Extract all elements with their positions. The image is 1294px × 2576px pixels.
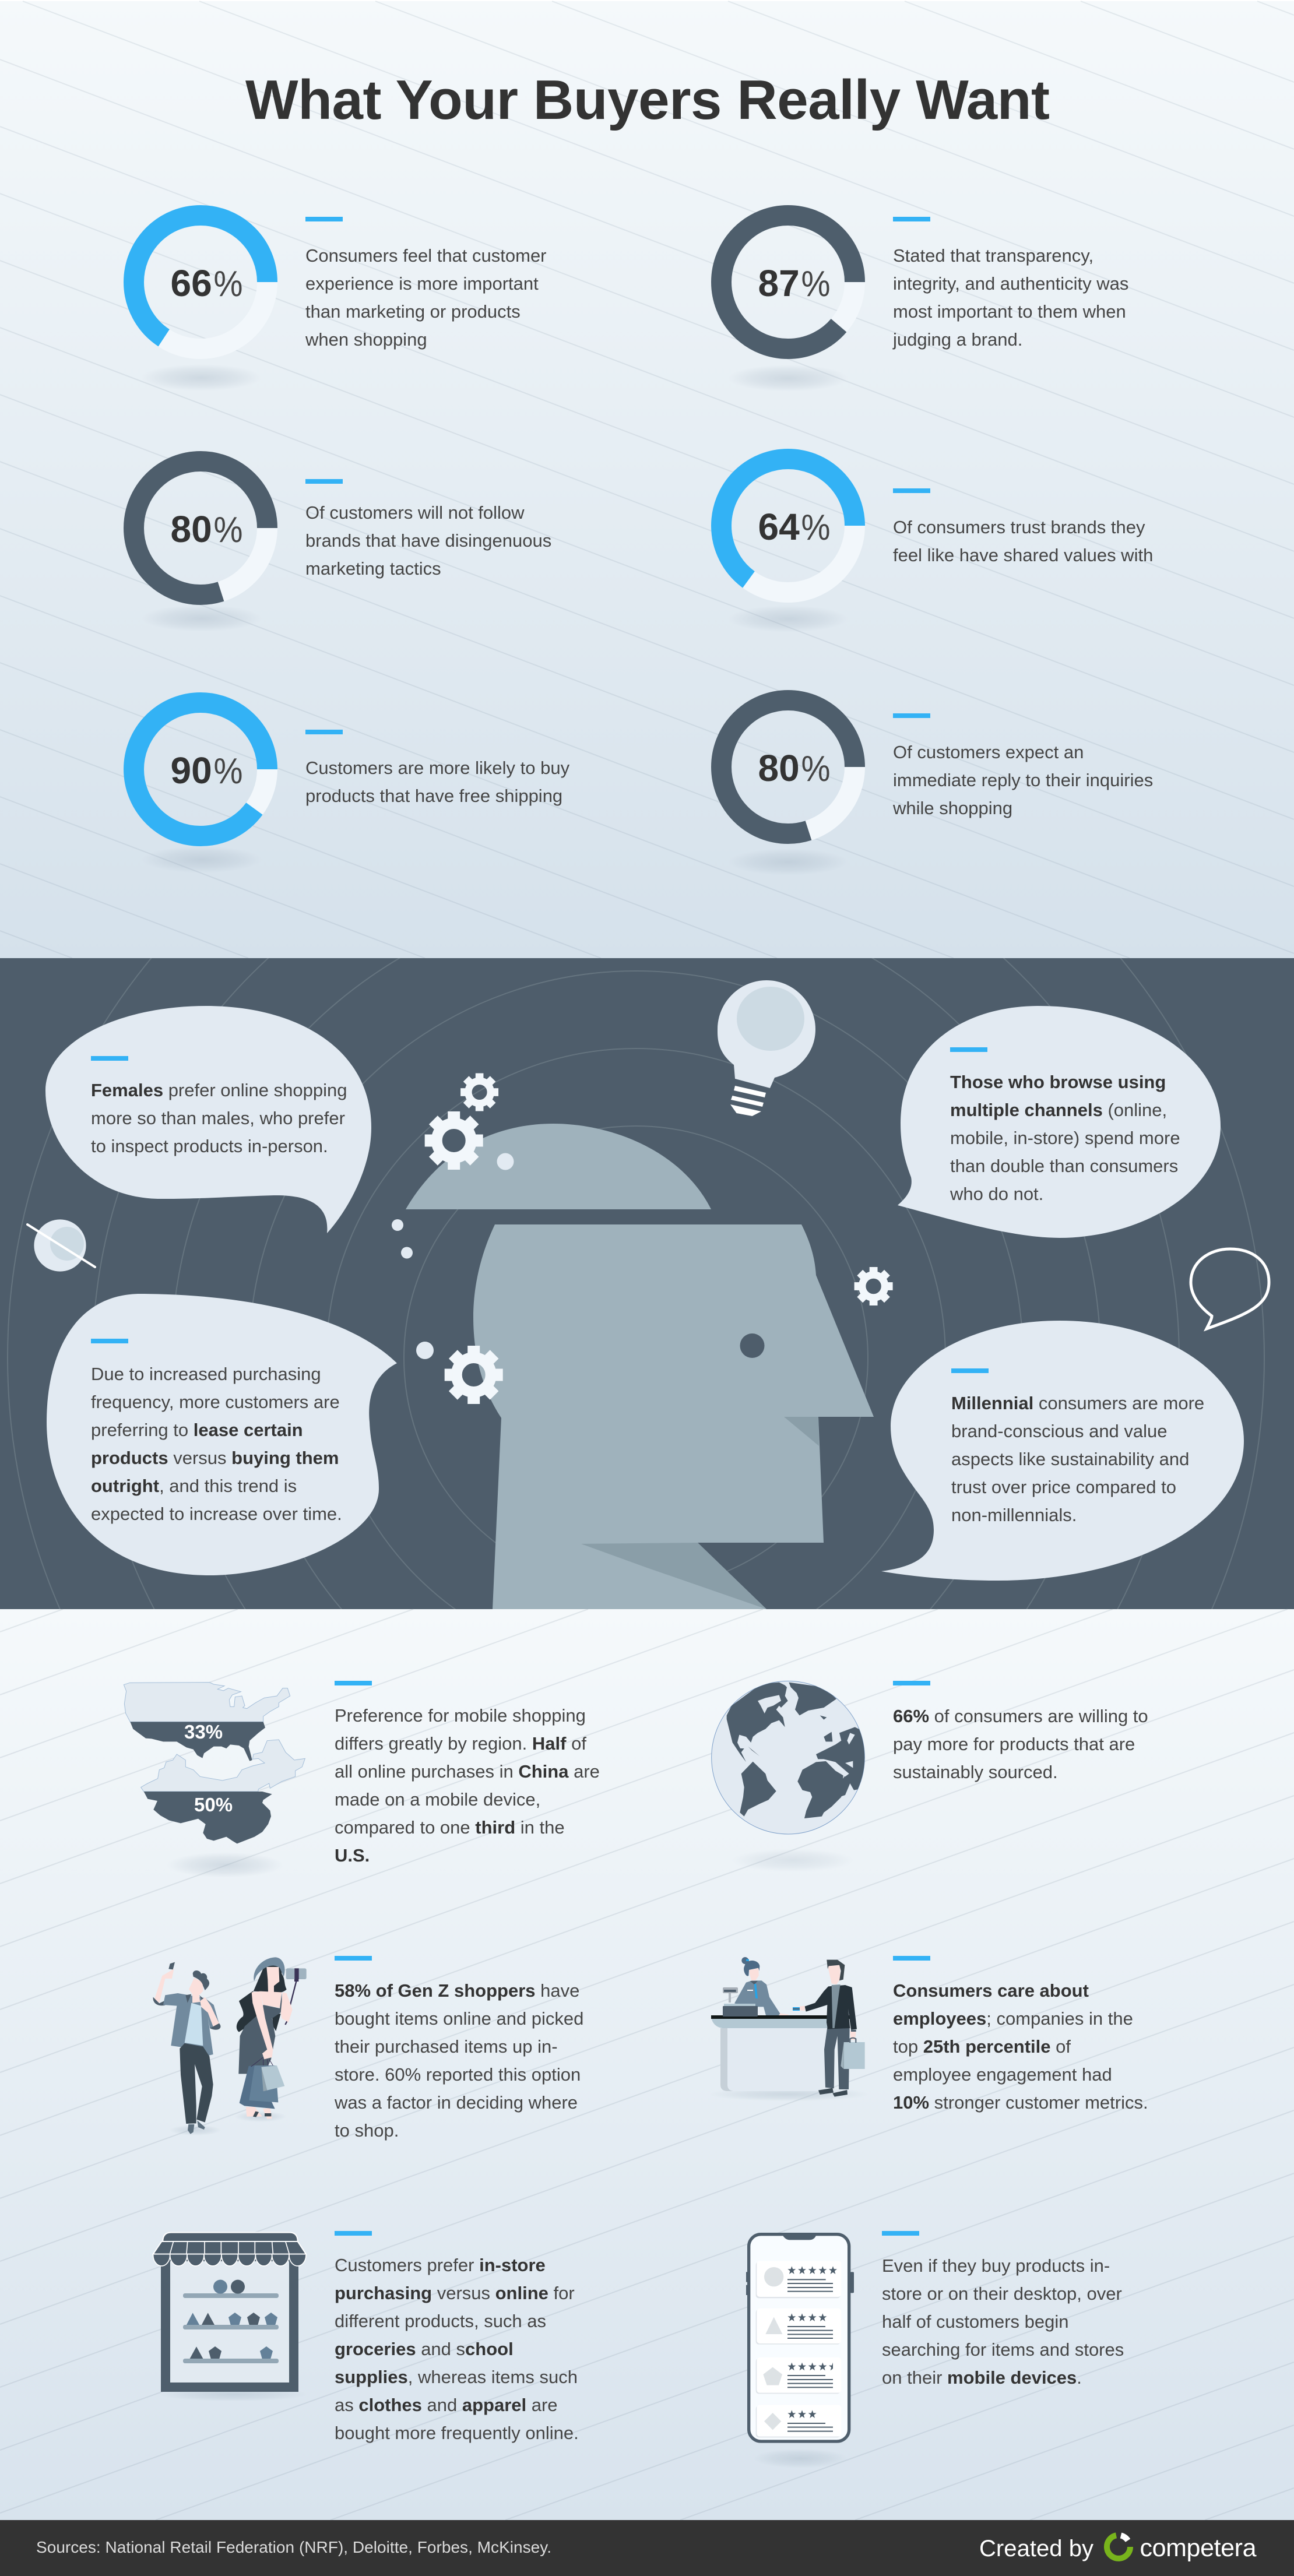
logo: competera wordmark: competera: [1140, 2534, 1257, 2562]
stat: 80 percent immediate reply: %: [801, 749, 830, 789]
text: mobile shopping by region: Preference for mobile shopping: [335, 1705, 586, 1726]
callout: lease versus buying: outright, and this trend is: [91, 1476, 297, 1496]
stat: 66 percent customer experience: Consumers feel that customer: [305, 245, 547, 266]
footer sources: Sources: National Retail Federation (NRF), Deloitte, Forbes, McKinsey.: [36, 2538, 551, 2556]
panel: bottom facts background: [0, 1609, 1294, 2520]
text: employees metrics: Consumers care about: [893, 1980, 1089, 2001]
callout: millennial consumers: brand-conscious and value: [951, 1421, 1168, 1441]
panel: top stats background: [0, 1, 1294, 958]
stat: 80 percent immediate reply: immediate reply to their inquiries: [893, 770, 1153, 790]
callout: multiple channels: mobile, in-store) spend more: [950, 1128, 1180, 1148]
text: Gen Z pick up in store: 58% of Gen Z shoppers have: [335, 1980, 579, 2001]
text: mobile search first: store or on their desktop, over: [882, 2283, 1122, 2304]
illustration: USA and China maps: 33%: [184, 1721, 223, 1743]
title: What Your Buyers Really Want: [245, 69, 1050, 131]
callout: lease versus buying: frequency, more customers are: [91, 1392, 340, 1412]
stat: 64 percent shared values: 64: [758, 506, 800, 548]
text: mobile shopping by region: [335, 1681, 600, 1866]
text: mobile shopping by region: made on a mobile device,: [335, 1789, 540, 1810]
stat: 66 percent customer experience: 66: [170, 262, 212, 304]
callout: females prefer online shopping: more so than males, who prefer: [91, 1108, 345, 1128]
stat: 87 percent transparency: [722, 216, 1128, 392]
illustration: Gen Z shoppers: [153, 1957, 307, 2135]
text: sustainably sourced: [893, 1681, 1148, 1782]
text: mobile shopping by region: differs greatly by region. Half of: [335, 1733, 586, 1754]
text: employees metrics: employees; companies in the: [893, 2008, 1133, 2029]
illustration: phone with product reviews: [746, 2234, 854, 2468]
stat: 90 percent free shipping: 90: [170, 749, 212, 791]
stat: 87 percent transparency: %: [801, 264, 830, 304]
callout: multiple channels: than double than consumers: [950, 1156, 1178, 1176]
text: in-store versus online: as clothes and apparel are: [335, 2395, 558, 2415]
text: employees metrics: employee engagement had: [893, 2064, 1112, 2085]
text: in-store versus online: bought more frequently online.: [335, 2423, 579, 2443]
callout: females prefer online shopping: to inspect products in-person.: [91, 1136, 328, 1156]
callout: lease versus buying: preferring to lease certain: [91, 1420, 303, 1440]
callout: multiple channels: Those who browse using: [950, 1072, 1166, 1092]
callout: millennial consumers: [881, 1321, 1244, 1581]
text: mobile shopping by region: all online purchases in China are: [335, 1761, 600, 1782]
callout: females prefer online shopping: [45, 1006, 371, 1233]
text: mobile search first: on their mobile devices.: [882, 2367, 1082, 2388]
text: mobile search first: Even if they buy products in-: [882, 2255, 1110, 2276]
stat: 80 percent disingenuous marketing: brands that have disingenuous: [305, 530, 551, 551]
text: Gen Z pick up in store: store. 60% reported this option: [335, 2064, 581, 2085]
illustration: USA and China maps: 50%: [194, 1794, 233, 1815]
icon: gears and thought dots: [392, 1074, 893, 1404]
text: Gen Z pick up in store: [334, 1956, 583, 2141]
created by: Created by: [979, 2536, 1093, 2561]
callout: millennial consumers: Millennial consumers are more: [951, 1393, 1204, 1413]
callout: millennial consumers: trust over price compared to: [951, 1477, 1176, 1497]
logo: competera ring: [1107, 2535, 1130, 2559]
text: in-store versus online: [335, 2231, 579, 2443]
callout: lease versus buying: products versus buying them: [91, 1448, 339, 1468]
text: employees metrics: [893, 1956, 1148, 2113]
text: sustainably sourced: pay more for products that are: [893, 1734, 1135, 1754]
illustration: cashier and customer: [709, 1957, 868, 2101]
illustration: globe: [712, 1681, 865, 1872]
stat: 87 percent transparency: 87: [758, 262, 800, 304]
illustration: store front: [153, 2233, 308, 2401]
stat: 64 percent shared values: [722, 459, 1153, 632]
text: mobile shopping by region: compared to one third in the: [335, 1817, 565, 1838]
stat: 80 percent disingenuous marketing: Of customers will not follow: [305, 502, 525, 523]
stat: 87 percent transparency: integrity, and authenticity was: [893, 273, 1128, 294]
panel: dark head section background: [0, 958, 1294, 1609]
text: mobile search first: [882, 2231, 1124, 2388]
illustration: USA and China maps: [124, 1683, 305, 1878]
text: in-store versus online: different products, such as: [335, 2311, 546, 2331]
text: sustainably sourced: sustainably sourced.: [893, 1762, 1058, 1782]
icon: light bulb: [718, 980, 815, 1116]
text: in-store versus online: purchasing versus online for: [335, 2283, 575, 2303]
stat: 87 percent transparency: judging a brand.: [892, 329, 1022, 350]
callout: lease versus buying: Due to increased purchasing: [91, 1364, 321, 1384]
text: mobile shopping by region: U.S.: [335, 1845, 370, 1866]
callout: lease versus buying: [47, 1294, 397, 1575]
stat: 80 percent immediate reply: while shopping: [892, 798, 1012, 818]
text: Gen Z pick up in store: to shop.: [335, 2120, 399, 2141]
stat: 66 percent customer experience: [134, 216, 547, 391]
callout: multiple channels: [898, 1006, 1221, 1238]
stat: 87 percent transparency: most important to them when: [893, 301, 1126, 322]
stat: 90 percent free shipping: Customers are more likely to buy: [305, 758, 570, 778]
callout: lease versus buying: expected to increase over time.: [91, 1504, 342, 1524]
text: Gen Z pick up in store: their purchased items up in-: [335, 2036, 558, 2057]
stat: 64 percent shared values: %: [801, 508, 830, 548]
stat: 64 percent shared values: feel like have shared values with: [893, 545, 1153, 565]
stat: 66 percent customer experience: %: [213, 264, 242, 304]
footer bar: [0, 2520, 1294, 2576]
stat: 87 percent transparency: Stated that transparency,: [893, 245, 1093, 266]
stat: 90 percent free shipping: [134, 703, 570, 873]
stat: 80 percent disingenuous marketing: %: [213, 510, 242, 550]
text: sustainably sourced: 66% of consumers are willing to: [893, 1706, 1148, 1726]
icon: planet: [27, 1219, 95, 1272]
stat: 80 percent disingenuous marketing: marketing tactics: [305, 558, 441, 579]
stat: 80 percent disingenuous marketing: 80: [170, 508, 212, 550]
text: mobile search first: searching for items and stores: [882, 2339, 1124, 2360]
stat: 64 percent shared values: Of consumers trust brands they: [893, 517, 1145, 537]
text: Gen Z pick up in store: was a factor in deciding where: [334, 2092, 578, 2113]
text: Gen Z pick up in store: bought items online and picked: [335, 2008, 583, 2029]
callout: millennial consumers: non-millennials.: [951, 1505, 1077, 1525]
text: in-store versus online: groceries and school: [335, 2339, 514, 2359]
text: mobile search first: half of customers begin: [882, 2311, 1069, 2332]
stat: 80 percent immediate reply: Of customers expect an: [893, 742, 1084, 762]
stat: 66 percent customer experience: experience is more important: [305, 273, 539, 294]
stat: 66 percent customer experience: when shopping: [305, 329, 427, 350]
illustration: head profile: [406, 1124, 874, 1609]
stat: 80 percent immediate reply: 80: [758, 747, 800, 789]
stat: 80 percent disingenuous marketing: [134, 462, 551, 632]
stat: 90 percent free shipping: %: [213, 751, 242, 791]
callout: multiple channels: who do not.: [950, 1184, 1043, 1204]
text: employees metrics: 10% stronger customer metrics.: [893, 2092, 1148, 2113]
callout: multiple channels: multiple channels (online,: [950, 1100, 1167, 1120]
stat: 90 percent free shipping: products that have free shipping: [305, 786, 562, 806]
stat: 66 percent customer experience: than marketing or products: [305, 301, 521, 322]
text: employees metrics: top 25th percentile of: [893, 2036, 1071, 2057]
icon: outlined speech bubble: [1191, 1249, 1269, 1329]
callout: females prefer online shopping: Females prefer online shopping: [91, 1080, 347, 1100]
text: in-store versus online: supplies, whereas items such: [335, 2367, 578, 2387]
stat: 80 percent immediate reply: [722, 701, 1153, 875]
text: in-store versus online: Customers prefer in-store: [335, 2255, 546, 2275]
callout: millennial consumers: aspects like sustainability and: [951, 1449, 1189, 1469]
